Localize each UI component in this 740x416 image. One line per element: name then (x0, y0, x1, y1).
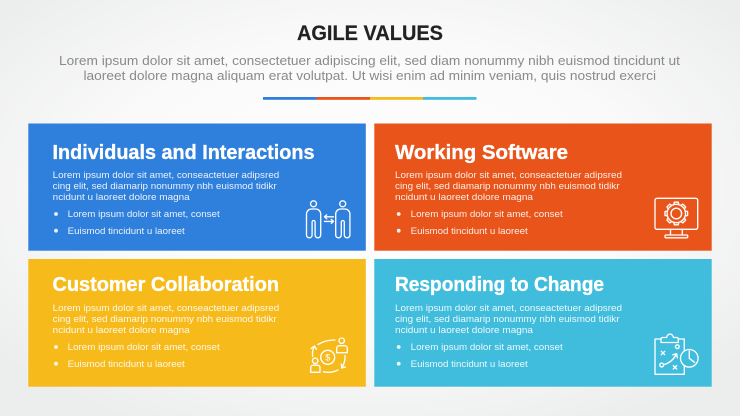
subtitle text block: Lorem ipsum dolor sit amet, consectetuer adipiscing elit, sed diam nonummy nibh euismod tincidunt ut (59, 54, 681, 68)
four-colour divider (263, 97, 476, 100)
bullet list: Lorem ipsum dolor sit amet, conset (68, 342, 220, 352)
bullet list: Euismod tincidunt u laoreet (411, 359, 528, 369)
heading: Responding to Change: Responding to Change (395, 273, 604, 296)
icon: strategy clipboard with clock (655, 334, 698, 374)
icon: customers exchanging money (311, 338, 347, 372)
icon: two people exchanging (306, 201, 350, 238)
icon: customers exchanging money: $ (325, 352, 330, 362)
body text: Lorem ipsum dolor sit amet, conseactetuer adipsred (395, 170, 622, 180)
body text: cing elit, sed diamarip nonummy nbh euismod tidikr (53, 314, 277, 324)
body text (53, 170, 279, 202)
bullet list (54, 209, 220, 236)
body text: Lorem ipsum dolor sit amet, conseactetuer adipsred (53, 303, 279, 313)
body text: cing elit, sed diamarip nonummy nbh euismod tidikr (395, 314, 620, 324)
bullet list: Euismod tincidunt u laoreet (68, 359, 185, 369)
bullet list: Lorem ipsum dolor sit amet, conset (411, 209, 563, 219)
icon: monitor with gear (655, 198, 698, 238)
subtitle text block: laoreet dolore magna aliquam erat volutpat. Ut wisi enim ad minim veniam, quis nostrud exerci (84, 69, 656, 83)
body text (53, 303, 279, 335)
bullet list: Euismod tincidunt u laoreet (68, 226, 185, 236)
title: AGILE VALUES (297, 22, 443, 45)
body text: Lorem ipsum dolor sit amet, conseactetuer adipsred (53, 170, 279, 180)
body text: ncidunt u laoreet dolore magna (53, 192, 191, 202)
subtitle text block (59, 54, 681, 83)
bullet list: Euismod tincidunt u laoreet (411, 226, 528, 236)
body text: Lorem ipsum dolor sit amet, conseactetuer adipsred (395, 303, 622, 313)
panel: Working Software (374, 124, 712, 251)
body text (395, 303, 622, 335)
heading: Customer Collaboration: Customer Collaboration (52, 273, 279, 296)
bullet list: Lorem ipsum dolor sit amet, conset (411, 342, 563, 352)
bullet list: Lorem ipsum dolor sit amet, conset (68, 209, 220, 219)
body text: cing elit, sed diamarip nonummy nbh euismod tidikr (53, 181, 277, 191)
panel: Responding to Change (374, 259, 712, 387)
body text: cing elit, sed diamarip nonummy nbh euismod tidikr (395, 181, 620, 191)
bullet list (397, 209, 563, 236)
body text (395, 170, 622, 202)
panel: Customer Collaboration (28, 259, 366, 387)
body text: ncidunt u laoreet dolore magna (395, 192, 534, 202)
panel: Individuals and Interactions (28, 124, 366, 251)
bullet list (54, 342, 220, 369)
body text: ncidunt u laoreet dolore magna (53, 325, 191, 335)
heading: Individuals and Interactions: Individuals and Interactions (52, 141, 314, 164)
body text: ncidunt u laoreet dolore magna (395, 325, 534, 335)
bullet list (397, 342, 563, 369)
heading: Working Software: Working Software (395, 141, 568, 164)
